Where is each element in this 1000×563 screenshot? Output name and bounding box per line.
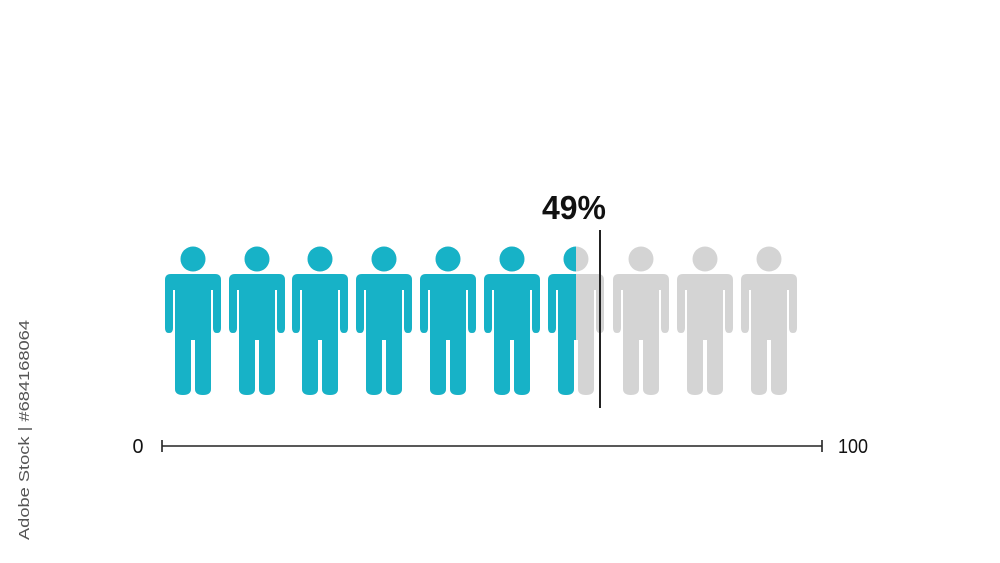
axis label 0: 0	[132, 436, 144, 458]
percentage label: 49%	[542, 189, 606, 226]
axis label 100: 100	[838, 436, 868, 458]
axis	[162, 440, 822, 452]
infographic	[18, 196, 868, 540]
marker line	[599, 230, 601, 408]
people row: teal filled portion	[165, 246, 604, 395]
stock id text: Adobe Stock | #684168064	[16, 320, 33, 540]
people row: gray	[165, 246, 797, 395]
